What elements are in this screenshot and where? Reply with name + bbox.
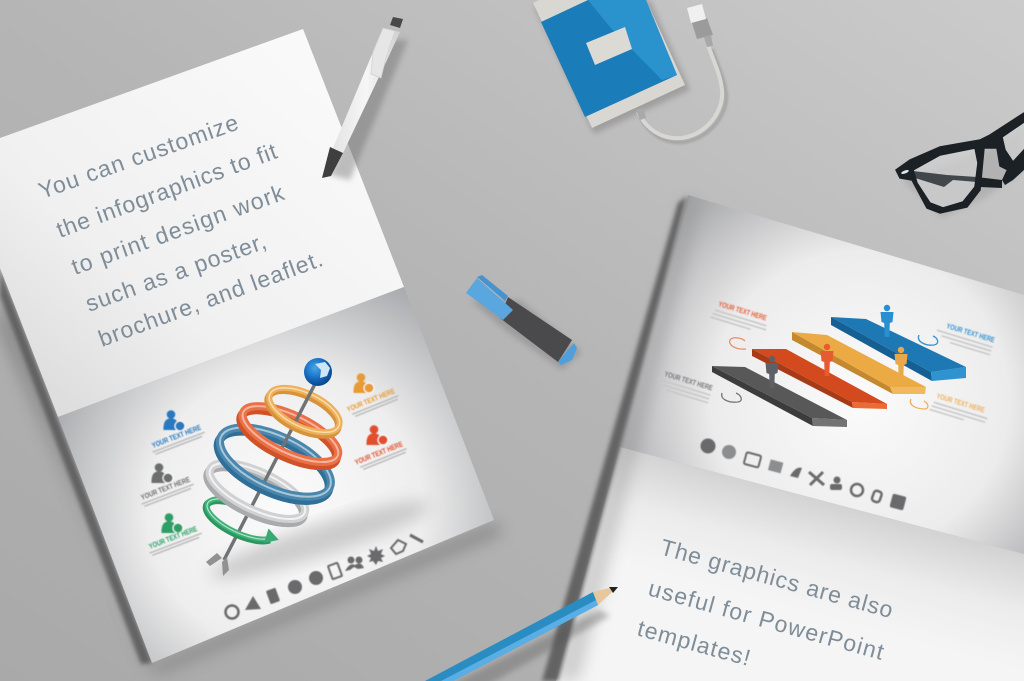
marker shadow (470, 300, 582, 370)
glasses shadow (902, 125, 1024, 218)
cable plug (636, 108, 646, 120)
figure: gray (766, 356, 778, 388)
light blue facet (588, 0, 677, 80)
second temple (1002, 155, 1024, 185)
icon: square button (889, 493, 907, 511)
marker cap ridge (477, 275, 508, 301)
chart: isometric plates (712, 305, 966, 427)
arrow fletching (206, 553, 229, 576)
caption: red (353, 425, 408, 472)
caption: red (710, 298, 771, 334)
upper white page (0, 29, 404, 417)
hinge highlight (901, 169, 909, 175)
icon row: left brochure (226, 535, 423, 618)
heading text: customize message (35, 109, 326, 352)
pencil light stripe (441, 600, 598, 681)
icon: gear (367, 546, 385, 565)
ground shadow (206, 489, 434, 591)
usb collar and body (692, 18, 713, 39)
gray plate (712, 366, 847, 427)
arrow: orange (910, 399, 928, 409)
heading text: customize message: You can customize (35, 109, 242, 204)
icon: tools (809, 472, 824, 485)
caption: blue (934, 319, 996, 356)
black temple arm (977, 177, 1002, 188)
green ring front (201, 491, 286, 552)
marker (466, 275, 582, 370)
pencil body (425, 592, 598, 681)
body text: PowerPoint message (635, 534, 896, 671)
lower graphic page (58, 287, 494, 663)
marker end (558, 343, 577, 365)
left page edge shadow (0, 270, 152, 664)
pen cap (390, 17, 403, 28)
icon: dollar (288, 580, 302, 594)
cable shadow (640, 49, 726, 142)
usb head (687, 4, 706, 23)
red ring front (234, 412, 338, 477)
blue ring front (208, 437, 330, 515)
arrow shaft (224, 382, 316, 560)
orange ring front (262, 394, 339, 444)
pencil shadow (440, 610, 610, 681)
body text: PowerPoint message: The graphics are also (658, 534, 896, 623)
panel: right brochure (542, 195, 1024, 681)
arrow: red (730, 338, 746, 349)
icon: handshake (391, 540, 406, 554)
panel: left brochure (0, 29, 500, 674)
caption: gray (138, 463, 195, 508)
icon: gauge (226, 606, 238, 618)
gray ring front (201, 469, 305, 534)
caption: red: YOUR TEXT HERE (717, 299, 768, 323)
blue plate (831, 317, 966, 381)
icon: wheel (700, 438, 716, 454)
pen shadow (330, 40, 408, 180)
orange ring back (262, 379, 346, 444)
charging cable (638, 45, 722, 138)
battery label (586, 27, 632, 65)
icon row: right brochure (700, 438, 907, 511)
pen (322, 17, 408, 180)
caption: orange (345, 373, 400, 419)
pen body (333, 28, 400, 153)
figure: red (820, 344, 834, 376)
caption: orange (929, 390, 991, 427)
label group: right brochure captions (654, 298, 996, 427)
heading text: customize message: the infographics to fit (53, 138, 281, 243)
shadow (534, 0, 690, 134)
figure: orange (894, 347, 908, 379)
cycle arrows (722, 335, 938, 409)
pencil lead (609, 587, 618, 593)
chart: spiral rings infographic (201, 358, 434, 591)
body text: PowerPoint message: useful for PowerPoint (646, 575, 887, 665)
soft spine shade on pages (556, 198, 700, 681)
arrow: gray (722, 393, 741, 402)
right lens tint (1002, 122, 1024, 162)
red ring back (234, 395, 346, 477)
heading text: customize message: brochure, and leaflet. (95, 245, 326, 352)
red plate (752, 349, 887, 409)
glasses (896, 113, 1024, 218)
caption: blue: YOUR TEXT HERE (945, 321, 996, 345)
power bank (533, 0, 726, 142)
arrow: blue (918, 335, 938, 345)
caption: gray: YOUR TEXT HERE (139, 475, 191, 502)
marker body (500, 297, 572, 362)
figure: blue (880, 305, 894, 337)
caption: green: YOUR TEXT HERE (147, 524, 198, 551)
caption: orange: YOUR TEXT HERE (345, 386, 396, 414)
pen clip (371, 28, 395, 78)
caption: blue: YOUR TEXT HERE (150, 423, 202, 450)
icon: document (328, 563, 342, 579)
upper graphic page (620, 195, 1024, 554)
pencil wood (593, 588, 612, 605)
icon: dial (851, 484, 863, 496)
heading text: customize message: to print design work (68, 179, 288, 280)
front frame (896, 113, 1024, 213)
blue ring back (208, 413, 341, 515)
body text: PowerPoint message: templates! (635, 615, 753, 671)
dark spine (542, 196, 687, 681)
gray temple arm (913, 171, 977, 187)
caption: gray: YOUR TEXT HERE (663, 369, 714, 393)
caption: gray (654, 368, 714, 404)
caption: blue (149, 410, 206, 456)
icon: pie (722, 445, 736, 459)
caption: green (146, 513, 203, 557)
heading text: customize message: such as a poster, (82, 228, 269, 317)
gray ring back (201, 452, 313, 534)
cream body (533, 0, 685, 128)
pen tip (322, 147, 343, 178)
icon: users (345, 556, 364, 571)
icon: calendar (744, 452, 761, 468)
icon: earth (309, 571, 323, 585)
icon: globe pin (304, 358, 332, 386)
caption: orange: YOUR TEXT HERE (935, 391, 986, 415)
orange plate (792, 332, 926, 394)
icon: map (768, 459, 783, 473)
icon: stamp (830, 476, 842, 490)
lower white page (556, 447, 1024, 681)
marker cap (466, 278, 513, 320)
caption: red: YOUR TEXT HERE (353, 439, 404, 467)
icon: hand (790, 468, 802, 478)
icon: warning (245, 596, 261, 610)
label group: left brochure captions (138, 373, 408, 557)
pencil (425, 587, 618, 681)
blue screen (541, 0, 677, 117)
icon: lock (871, 490, 882, 503)
usb neck (704, 35, 713, 47)
left lens tint (913, 148, 978, 208)
icon: devices (266, 588, 280, 604)
brochure drop shadow (0, 290, 500, 674)
icon: wrench (410, 535, 423, 542)
